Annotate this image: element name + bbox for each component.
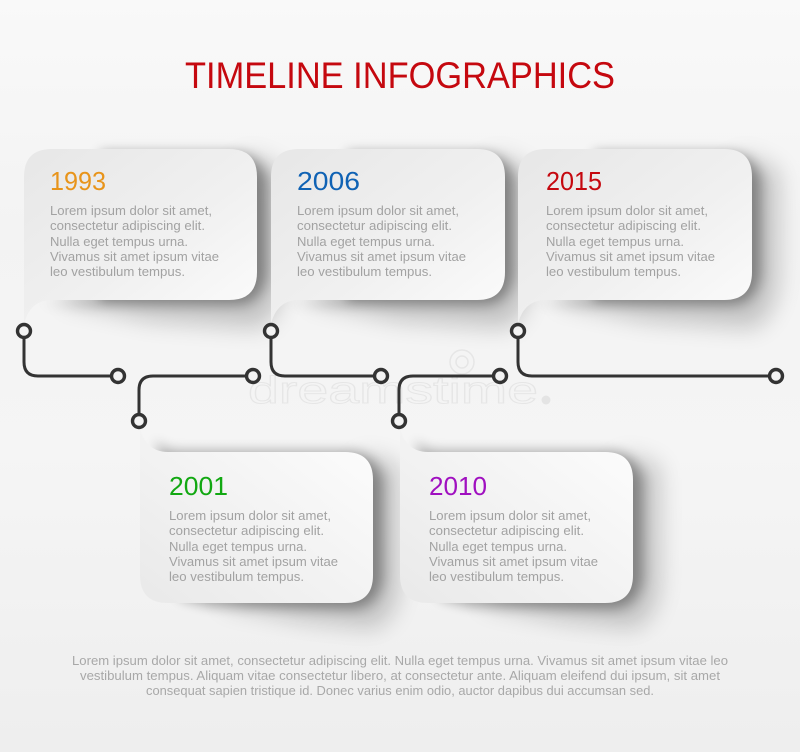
panel: 2006: 2006 [297, 166, 360, 196]
panel: 2015 [518, 149, 778, 328]
panel: 2010: Nulla eget tempus urna. [429, 539, 567, 554]
panel: 2001: Lorem ipsum dolor sit amet, [169, 508, 331, 523]
panel: 2006: consectetur adipiscing elit. [297, 218, 452, 233]
footer text [72, 654, 728, 698]
watermark: dreamstime [248, 370, 538, 412]
panel: 2015: Nulla eget tempus urna. [546, 234, 684, 249]
panel: 2015: consectetur adipiscing elit. [546, 218, 701, 233]
panel: 2010 [400, 428, 659, 628]
timeline connector 2015 [512, 324, 782, 382]
panel: 1993 [24, 149, 284, 328]
panel: 2006: Lorem ipsum dolor sit amet, [297, 203, 459, 218]
footer text: Lorem ipsum dolor sit amet, consectetur adipiscing elit. Nulla eget tempus urna. Vivamus sit amet ipsum vitae leo [72, 654, 728, 668]
panel: 2001: consectetur adipiscing elit. [169, 523, 324, 538]
timeline connector 2006 [264, 324, 388, 382]
title: TIMELINE INFOGRAPHICS [185, 55, 615, 96]
panel: 2006: Vivamus sit amet ipsum vitae [297, 249, 466, 264]
panel: 2006 [271, 149, 531, 328]
panel: 1993: leo vestibulum tempus. [50, 264, 185, 279]
panel: 2001: Vivamus sit amet ipsum vitae [169, 554, 338, 569]
panel: 1993: Nulla eget tempus urna. [50, 234, 188, 249]
watermark [248, 350, 550, 412]
panel: 2015: 2015 [546, 166, 602, 196]
panel: 2010: Lorem ipsum dolor sit amet, [429, 508, 591, 523]
panel: 2010: 2010 [429, 471, 487, 501]
panel: 2010: Vivamus sit amet ipsum vitae [429, 554, 598, 569]
panel: 2010: consectetur adipiscing elit. [429, 523, 584, 538]
panel: 2001: 2001 [169, 471, 228, 501]
panel: 2010: leo vestibulum tempus. [429, 569, 564, 584]
panel: 2015: Lorem ipsum dolor sit amet, [546, 203, 708, 218]
footer text: consequat sapien tristique id. Donec varius enim odio, auctor dapibus dui accumsan sed. [146, 684, 654, 698]
panel: 2006: Nulla eget tempus urna. [297, 234, 435, 249]
timeline connector 2001 [132, 370, 260, 428]
panel: 1993: Lorem ipsum dolor sit amet, [50, 203, 212, 218]
panel: 2001 [140, 428, 399, 628]
footer text: vestibulum tempus. Aliquam vitae consectetur libero, at consectetur ante. Aliquam eleifend dui ipsum, sit amet [80, 669, 721, 683]
panel: 2001: Nulla eget tempus urna. [169, 539, 307, 554]
panel: 2015: Vivamus sit amet ipsum vitae [546, 249, 715, 264]
panel: 1993: Vivamus sit amet ipsum vitae [50, 249, 219, 264]
panel: 1993: 1993 [50, 166, 106, 196]
panel: 1993: consectetur adipiscing elit. [50, 218, 205, 233]
panel: 2006: leo vestibulum tempus. [297, 264, 432, 279]
timeline connector 2010 [392, 370, 506, 428]
panel: 2001: leo vestibulum tempus. [169, 569, 304, 584]
panel: 2015: leo vestibulum tempus. [546, 264, 681, 279]
timeline connector 1993 [18, 324, 124, 382]
